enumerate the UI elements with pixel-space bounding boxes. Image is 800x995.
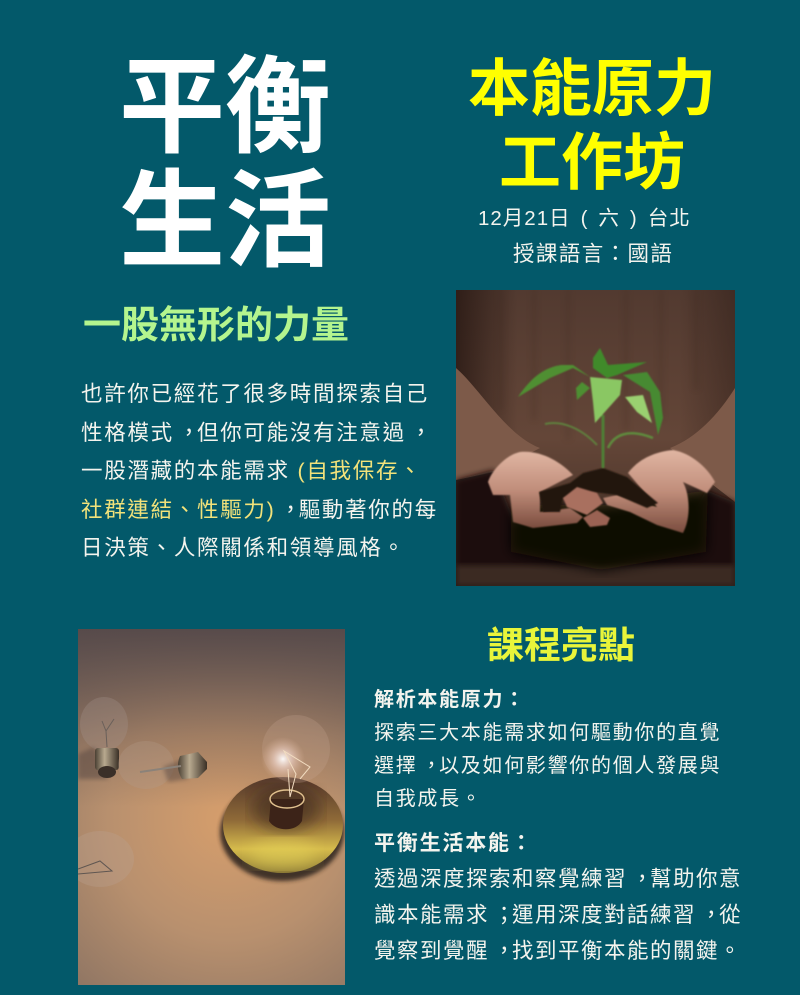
text block: introduction: 日決策、人際關係和領導風格。 bbox=[81, 536, 406, 560]
text block: introduction: 也許你已經花了很多時間探索自己 bbox=[81, 382, 429, 406]
description: 識本能需求；運用深度對話練習，從 bbox=[374, 903, 742, 927]
left hand bbox=[488, 452, 583, 528]
bulb 3 bbox=[66, 831, 134, 887]
course highlight: 平衡生活本能 bbox=[374, 832, 742, 963]
subheading: 平衡生活本能： bbox=[374, 832, 534, 855]
event details: date and language bbox=[478, 207, 691, 266]
description: 選擇，以及如何影響你的個人發展與 bbox=[374, 755, 721, 777]
bulb 2 bbox=[118, 741, 207, 789]
photo: light bulbs on a table bbox=[78, 629, 345, 985]
description: 自我成長。 bbox=[374, 788, 483, 810]
description: 透過深度探索和察覺練習，幫助你意 bbox=[374, 867, 742, 891]
heading: 本能原力工作坊: 工作坊 bbox=[499, 129, 685, 198]
heading: 本能原力工作坊 bbox=[468, 55, 716, 198]
right hand bbox=[603, 450, 715, 533]
soil bbox=[539, 468, 658, 512]
heading: 本能原力工作坊: 本能原力 bbox=[468, 55, 716, 124]
text block: introduction: 社群連結、性驅力)，驅動著你的每 bbox=[81, 498, 438, 522]
bulb 1 bbox=[78, 697, 128, 779]
photo: hands holding a seedling bbox=[456, 290, 735, 586]
description: 覺察到覺醒，找到平衡本能的關鍵。 bbox=[374, 939, 742, 963]
title: 平衡生活 bbox=[119, 49, 331, 281]
title: 平衡生活: 平衡 bbox=[119, 49, 331, 167]
title: 平衡生活: 生活 bbox=[119, 163, 331, 281]
lower shadow bbox=[456, 470, 735, 586]
fingers bbox=[563, 487, 603, 515]
text block: introduction: 一股潛藏的本能需求 (自我保存、 bbox=[81, 459, 422, 483]
heading: 一股無形的力量: 一股無形的力量 bbox=[83, 305, 349, 347]
lit bulb on disc bbox=[220, 715, 344, 881]
subheading: 解析本能原力： bbox=[374, 689, 526, 711]
seedling bbox=[518, 348, 663, 468]
arms bbox=[456, 368, 540, 480]
description: 探索三大本能需求如何驅動你的直覺 bbox=[374, 722, 721, 744]
date and location: 12月21日 ( 六 ) 台北 bbox=[478, 207, 691, 230]
description bbox=[374, 722, 721, 810]
text block: introduction: 性格模式，但你可能沒有注意過， bbox=[81, 421, 433, 445]
description bbox=[374, 867, 742, 963]
course highlight: 解析本能原力 bbox=[374, 688, 721, 810]
text block: introduction bbox=[81, 382, 438, 560]
teaching language: 授課語言：國語 bbox=[513, 242, 673, 266]
heading: 課程亮點: 課程亮點 bbox=[487, 625, 635, 666]
